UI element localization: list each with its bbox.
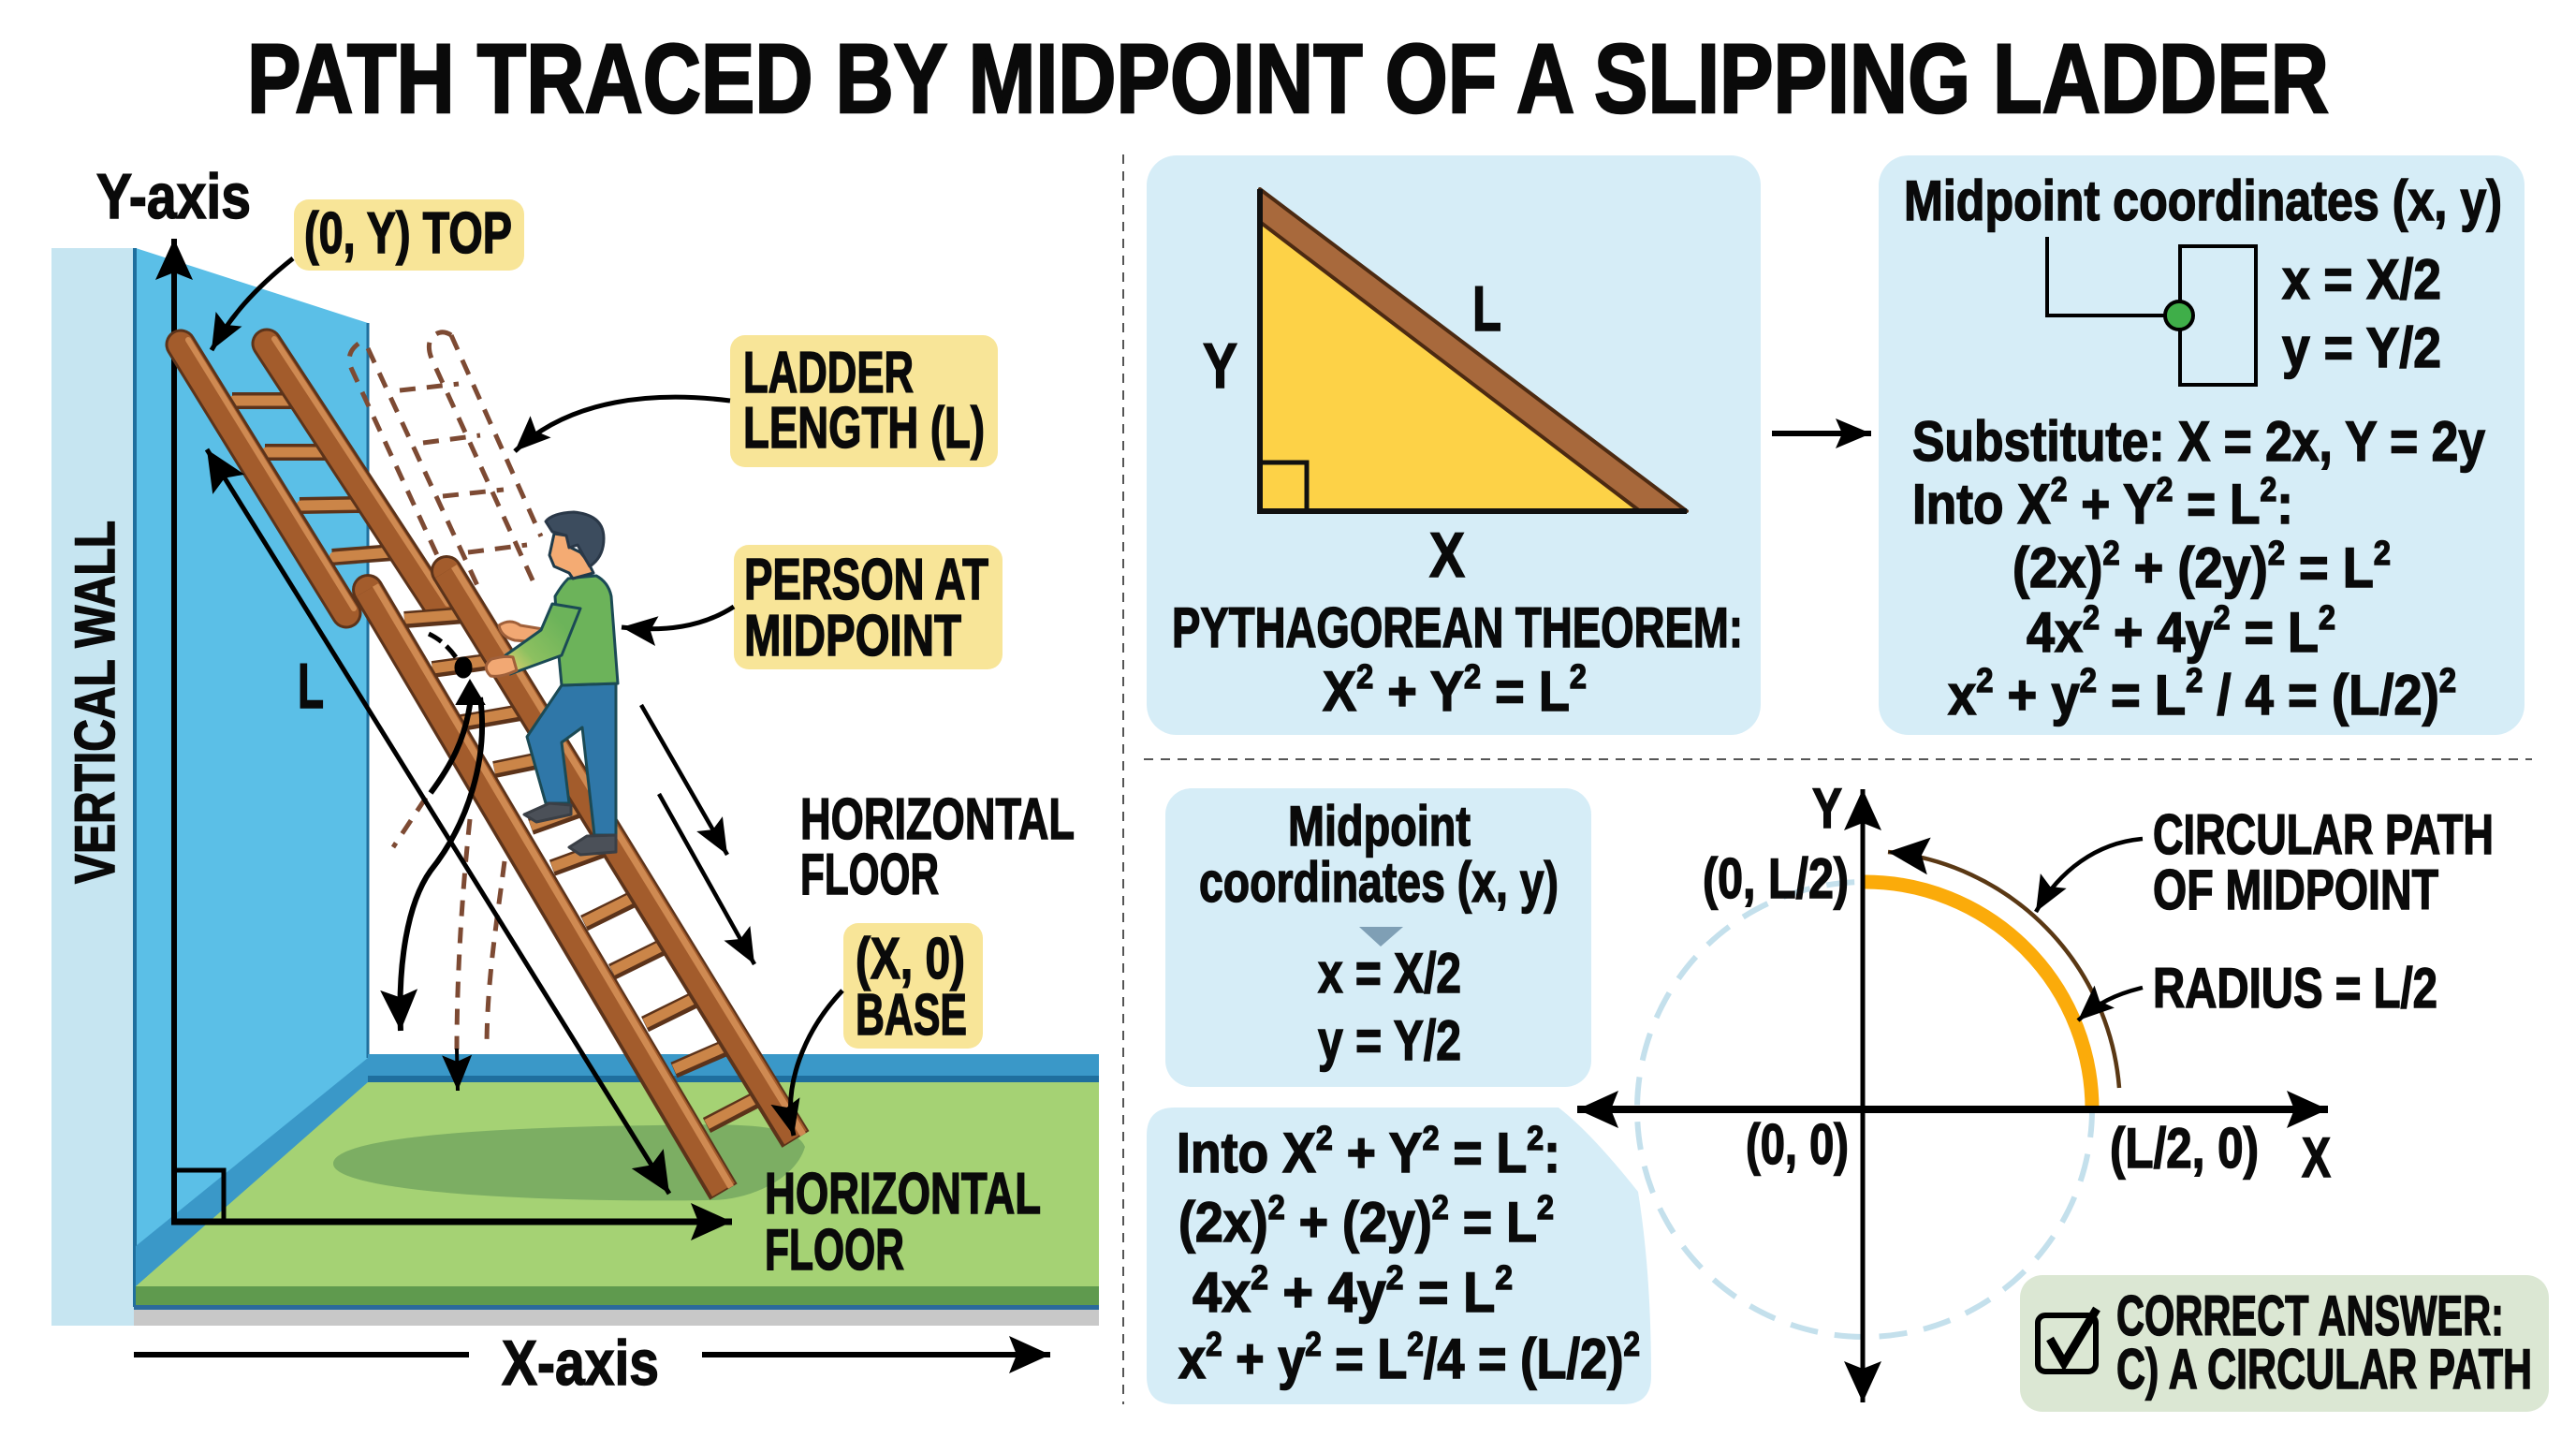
callout: ladder length bbox=[515, 335, 998, 467]
outer direction arc bbox=[1888, 852, 2119, 1088]
midpoint formulas bbox=[2282, 248, 2441, 379]
orange midpoint arc bbox=[1865, 882, 2092, 1111]
axis labels: (0, L/2) bbox=[1703, 847, 1849, 910]
side labels bbox=[1203, 273, 1501, 591]
substitution steps: Into X bbox=[1912, 473, 2069, 536]
label: horizontal floor upper bbox=[800, 787, 1075, 907]
icon: checkbox bbox=[2038, 1309, 2097, 1372]
panel: substitution formulas: : bbox=[1544, 1122, 1560, 1184]
ladder upper position bbox=[181, 339, 447, 613]
theorem text: = L bbox=[1481, 660, 1570, 723]
substitution steps: = L bbox=[2231, 601, 2319, 664]
panel: substitution formulas: 2 bbox=[1268, 1188, 1285, 1226]
substitution steps: 2 bbox=[2261, 470, 2276, 508]
axis labels: (L/2, 0) bbox=[2110, 1117, 2259, 1180]
callout: ladder length: LADDER bbox=[743, 341, 914, 405]
label: L on wall: L bbox=[298, 651, 324, 722]
panel: substitution formulas: = L bbox=[1403, 1261, 1495, 1324]
down triangle bbox=[1359, 927, 1403, 946]
panel: substitution formulas: (2x) bbox=[1178, 1191, 1279, 1254]
panel: substitution formulas: 2 bbox=[1537, 1188, 1554, 1226]
theorem text: 2 bbox=[1464, 657, 1481, 696]
panel: substitution formulas: = L bbox=[1322, 1328, 1407, 1390]
y axis bbox=[1861, 789, 1865, 1402]
panel: substitution formulas: = L bbox=[1439, 1122, 1527, 1184]
callout: (0, Y) TOP: (0, Y) TOP bbox=[304, 201, 512, 266]
axis labels bbox=[1703, 777, 2331, 1189]
x axis arrow on floor bbox=[171, 1219, 732, 1225]
callout: circular path bbox=[2036, 803, 2494, 921]
panel: substitution formulas: 2 bbox=[1251, 1258, 1268, 1297]
chart: circular path axes bbox=[1577, 777, 2494, 1402]
theorem text: PYTHAGOREAN THEOREM: bbox=[1172, 596, 1743, 659]
axis labels: X bbox=[2302, 1126, 2331, 1189]
theorem text: X bbox=[1323, 660, 1360, 723]
wall bbox=[51, 248, 1099, 1326]
ghost ladder dashed bbox=[349, 332, 541, 1049]
panel: substitution formulas: 2 bbox=[1527, 1119, 1544, 1157]
panel: substitution formulas: 2 bbox=[1386, 1258, 1403, 1297]
callout: radius bbox=[2078, 957, 2437, 1020]
panel: substitution formulas: 2 bbox=[1407, 1325, 1424, 1363]
callout: person at midpoint bbox=[622, 545, 1003, 669]
label: vertical wall: VERTICAL WALL bbox=[64, 521, 126, 884]
midpoint dot and motion arrows bbox=[400, 634, 484, 1091]
back hand bbox=[499, 622, 543, 642]
substitution steps: 2 bbox=[2080, 661, 2097, 699]
panel: substitution formulas: 2 bbox=[1432, 1188, 1449, 1226]
midpoint diagram bbox=[2047, 237, 2256, 385]
panel: ladder scene bbox=[51, 161, 1099, 1399]
shirt bbox=[555, 576, 618, 685]
substitution steps: + 4y bbox=[2100, 601, 2214, 664]
theorem text: + Y bbox=[1373, 660, 1464, 723]
panel: substitution formulas: 2 bbox=[1305, 1325, 1322, 1363]
theorem text: 2 bbox=[1570, 657, 1587, 696]
panel: substitution formulas: + (2y) bbox=[1285, 1191, 1432, 1254]
substitution steps: 2 bbox=[2051, 470, 2067, 508]
y axis arrow bbox=[171, 239, 177, 1222]
panel: substitution formulas: Into X bbox=[1177, 1122, 1333, 1184]
panel: substitution formulas: x bbox=[1178, 1328, 1209, 1390]
side labels: Y bbox=[1203, 330, 1237, 402]
panel: pythagorean theorem bbox=[1147, 155, 1761, 735]
substitution steps: : bbox=[2276, 473, 2293, 536]
substitution steps: = L bbox=[2097, 664, 2186, 726]
theorem text: 2 bbox=[1356, 657, 1373, 696]
substitution steps: = L bbox=[2173, 473, 2261, 536]
arrow between panels bbox=[1772, 431, 1871, 436]
callout: person at midpoint: MIDPOINT bbox=[744, 604, 961, 668]
panel: midpoint coordinates: Midpoint bbox=[1288, 795, 1471, 858]
substitution steps: 4x bbox=[2027, 601, 2089, 664]
panel: substitution formulas: 4x bbox=[1193, 1261, 1255, 1324]
x axis bbox=[1577, 1106, 2328, 1113]
panel: substitution formulas: = L bbox=[1449, 1191, 1537, 1254]
arm in front bbox=[505, 604, 580, 674]
substitution steps: / 4 = (L/2) bbox=[2203, 664, 2439, 726]
dashed full circle bbox=[1637, 882, 2092, 1337]
callout: (X, 0) base: BASE bbox=[856, 983, 967, 1048]
substitution steps: 2 bbox=[2319, 598, 2335, 637]
panel: midpoint coordinates: coordinates (x, y) bbox=[1199, 851, 1559, 914]
substitution steps: = L bbox=[2285, 536, 2374, 599]
panel: substitution formulas: 2 bbox=[1316, 1119, 1333, 1157]
panel: substitution formulas: 2 bbox=[1423, 1119, 1439, 1157]
substitution steps: (2x) bbox=[2012, 536, 2113, 599]
axis labels: (0, 0) bbox=[1746, 1113, 1849, 1176]
right angle marker bbox=[174, 1170, 224, 1222]
substitution steps: x bbox=[1948, 664, 1979, 726]
panel: substitution formulas: + y bbox=[1222, 1328, 1306, 1390]
panel: substitution formulas: 2 bbox=[1624, 1325, 1640, 1363]
substitution steps: 2 bbox=[2186, 661, 2203, 699]
panel: midpoint coordinates: y = Y/2 bbox=[1318, 1009, 1461, 1072]
substitution steps: 2 bbox=[1976, 661, 1993, 699]
panel: substitution formulas: /4 = (L/2) bbox=[1424, 1328, 1624, 1390]
substitution steps: + (2y) bbox=[2120, 536, 2268, 599]
axis labels: Y bbox=[1812, 777, 1842, 840]
panel: substitution formulas: + Y bbox=[1333, 1122, 1423, 1184]
label: horizontal floor lower: FLOOR bbox=[765, 1218, 904, 1283]
substitution steps: + y bbox=[1993, 664, 2080, 726]
label: horizontal floor upper: HORIZONTAL bbox=[800, 787, 1075, 852]
triangle bbox=[1260, 189, 1687, 511]
substitution steps: 2 bbox=[2439, 661, 2456, 699]
side labels: X bbox=[1429, 520, 1465, 591]
label: horizontal floor lower bbox=[765, 1162, 1041, 1283]
substitution steps: 2 bbox=[2268, 534, 2285, 572]
panel: midpoint coordinates: x = X/2 bbox=[1318, 942, 1461, 1005]
substitution steps: 2 bbox=[2102, 534, 2120, 572]
callout: (X, 0) base bbox=[791, 923, 983, 1136]
midpoint formulas: x = X/2 bbox=[2282, 248, 2441, 311]
midpoint formulas: y = Y/2 bbox=[2282, 316, 2441, 379]
leg and shoes bbox=[524, 683, 616, 855]
substitution steps: 2 bbox=[2374, 534, 2391, 572]
long L arrow bbox=[207, 449, 669, 1194]
callout: (X, 0) base: (X, 0) bbox=[856, 927, 965, 991]
substitution steps bbox=[1912, 410, 2486, 726]
side labels: L bbox=[1472, 273, 1501, 345]
label: X-axis with arrow: X-axis bbox=[502, 1328, 659, 1399]
panel: midpoint derivation bbox=[1879, 155, 2525, 735]
substitution steps: 2 bbox=[2214, 598, 2231, 637]
floor bbox=[134, 1082, 1099, 1326]
callout: (0, Y) TOP bbox=[212, 199, 524, 350]
panel: substitution formulas: 2 bbox=[1206, 1325, 1222, 1363]
panel: midpoint coordinates bbox=[1165, 788, 1591, 1087]
theorem text bbox=[1172, 596, 1743, 723]
callout: radius: RADIUS = L/2 bbox=[2153, 957, 2437, 1020]
label: horizontal floor lower: HORIZONTAL bbox=[765, 1162, 1041, 1226]
head bbox=[549, 534, 593, 579]
substitution steps: 2 bbox=[2157, 470, 2173, 508]
ladder slipped position bbox=[352, 555, 803, 1192]
substitution steps: Substitute: X = 2x, Y = 2y bbox=[1912, 410, 2486, 473]
label: Y-axis: Y-axis bbox=[96, 161, 251, 232]
callout: circular path: OF MIDPOINT bbox=[2153, 858, 2438, 921]
substitution steps: 2 bbox=[2083, 598, 2100, 637]
panel: substitution formulas: 2 bbox=[1495, 1258, 1513, 1297]
panel: substitution formulas bbox=[1147, 1108, 1651, 1404]
person at midpoint bbox=[486, 512, 618, 855]
label: horizontal floor upper: FLOOR bbox=[800, 843, 939, 907]
callout: person at midpoint: PERSON AT bbox=[744, 548, 988, 612]
slide direction arrows bbox=[641, 705, 754, 964]
callout: correct answer bbox=[2020, 1275, 2549, 1412]
panel: substitution formulas: + 4y bbox=[1268, 1261, 1386, 1324]
substitution steps: + Y bbox=[2067, 473, 2157, 536]
callout: ladder length: LENGTH (L) bbox=[743, 396, 985, 461]
